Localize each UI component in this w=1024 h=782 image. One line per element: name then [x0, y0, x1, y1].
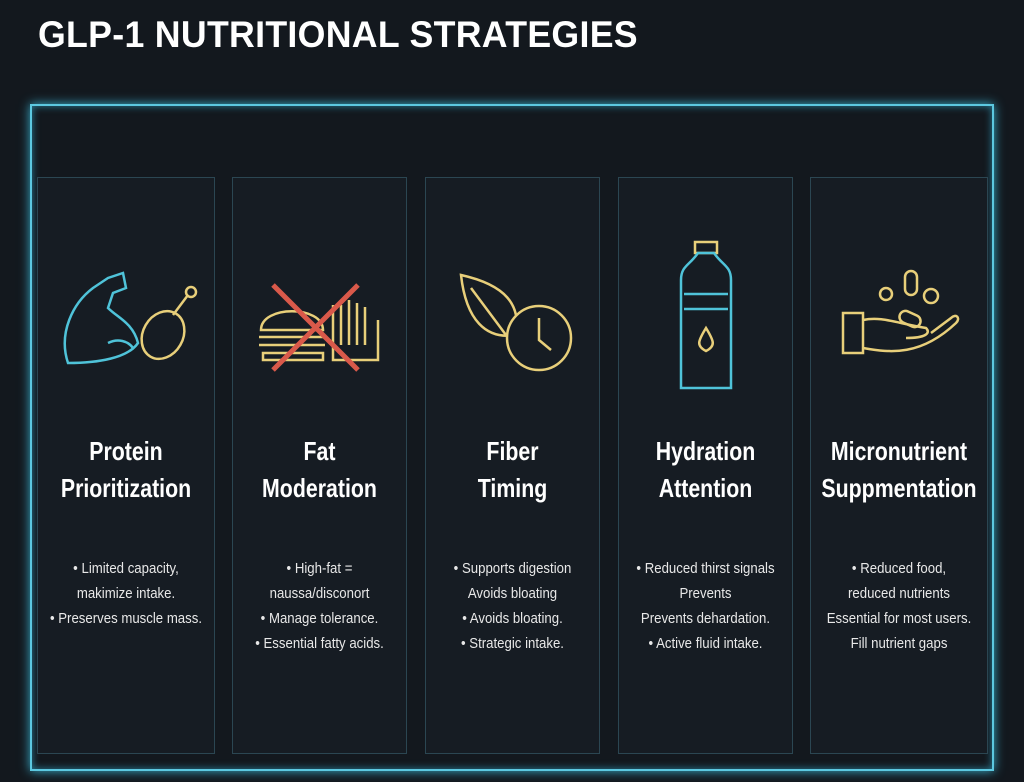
heading: Protein	[89, 436, 163, 466]
heading	[478, 436, 547, 503]
heading: Fat	[304, 436, 335, 466]
bullets: naussa/disconort	[270, 585, 369, 602]
panel: hydration	[618, 177, 793, 754]
panel: protein	[37, 177, 215, 754]
icon: bottle	[680, 240, 732, 390]
heading: Moderation	[262, 473, 377, 503]
bullets: • Supports digestion	[454, 560, 571, 577]
bullets: reduced nutrients	[848, 585, 950, 602]
icon: hand with pills	[842, 270, 960, 354]
heading: Micronutrient	[831, 436, 967, 466]
bullets: Prevents	[679, 585, 732, 602]
heading	[262, 436, 377, 503]
title: GLP-1 NUTRITIONAL STRATEGIES	[38, 14, 638, 55]
bullets: • Strategic intake.	[461, 635, 564, 652]
heading: Hydration	[656, 436, 755, 466]
heading: Fiber	[486, 436, 539, 466]
heading: Prioritization	[61, 473, 191, 503]
bullets	[255, 560, 384, 652]
bullets	[636, 560, 775, 652]
icon: arm and drumstick	[64, 271, 198, 364]
bullets: • Reduced thirst signals	[636, 560, 775, 577]
heading	[821, 436, 977, 503]
heading: Suppmentation	[821, 473, 977, 503]
bullets: Essential for most users.	[827, 610, 971, 627]
bullets: • Avoids bloating.	[462, 610, 563, 627]
bullets: Avoids bloating	[468, 585, 557, 602]
icon: leaf and clock	[460, 273, 572, 372]
panel: fiber	[425, 177, 600, 754]
bullets	[827, 560, 971, 652]
heading: Timing	[478, 473, 547, 503]
bullets: makimize intake.	[77, 585, 175, 602]
bullets: • High-fat =	[287, 560, 352, 577]
bullets: • Reduced food,	[852, 560, 946, 577]
bullets	[50, 560, 202, 627]
heading: Attention	[659, 473, 752, 503]
bullets: Prevents dehardation.	[641, 610, 770, 627]
heading	[61, 436, 191, 503]
bullets: • Manage tolerance.	[261, 610, 378, 627]
bullets: Fill nutrient gaps	[851, 635, 947, 652]
heading	[656, 436, 755, 503]
icon: burger fries crossed	[259, 283, 380, 372]
bullets: • Limited capacity,	[73, 560, 179, 577]
bullets: • Essential fatty acids.	[255, 635, 384, 652]
bullets: • Preserves muscle mass.	[50, 610, 202, 627]
panel: micronutrient	[810, 177, 988, 754]
panel: fat	[232, 177, 407, 754]
bullets: • Active fluid intake.	[649, 635, 762, 652]
bullets	[454, 560, 571, 652]
